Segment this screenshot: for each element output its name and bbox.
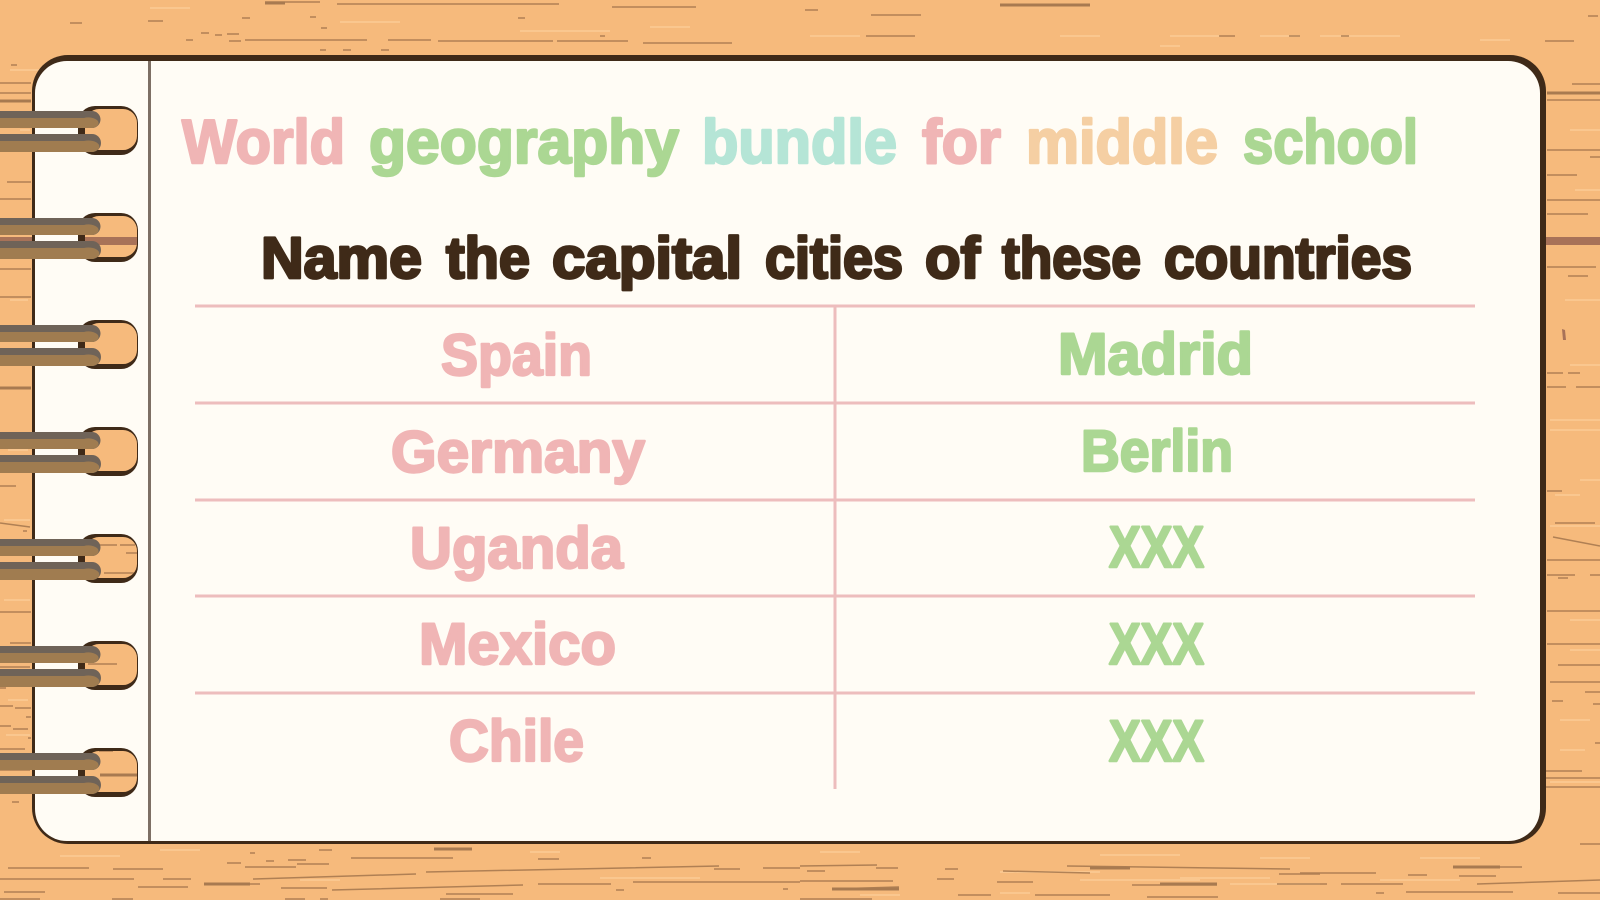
ring wires — [0, 111, 101, 794]
title: World — [182, 108, 345, 177]
heading: Name — [261, 226, 422, 291]
row: Spain: Spain — [441, 323, 592, 388]
spiral binding — [0, 106, 138, 797]
row: Mexico — [419, 612, 1204, 677]
row: Uganda: XXX — [1109, 515, 1204, 580]
row: Germany: Germany — [391, 420, 645, 485]
heading: capital — [552, 226, 742, 291]
title: school — [1243, 108, 1418, 177]
row: Germany: Berlin — [1081, 419, 1233, 484]
heading — [261, 226, 1412, 291]
row: Mexico: Mexico — [419, 612, 616, 677]
row: Germany — [391, 419, 1233, 485]
title: geography — [369, 108, 680, 177]
row: Spain — [441, 322, 1253, 388]
title — [182, 108, 1418, 177]
heading: cities — [765, 226, 903, 291]
row: Chile: XXX — [1109, 709, 1204, 774]
title: bundle — [702, 108, 897, 177]
row: Chile: Chile — [449, 709, 584, 774]
heading: these — [1002, 226, 1141, 291]
row: Mexico: XXX — [1109, 612, 1204, 677]
row: Chile — [449, 709, 1204, 774]
heading: the — [446, 226, 530, 291]
title: for — [922, 108, 1001, 177]
heading: countries — [1164, 226, 1412, 291]
row: Uganda — [410, 515, 1204, 581]
ring holes — [78, 106, 138, 797]
title: middle — [1026, 108, 1218, 177]
row: Uganda: Uganda — [410, 516, 624, 581]
heading: of — [925, 226, 981, 291]
table — [195, 306, 1475, 789]
row: Spain: Madrid — [1058, 322, 1253, 387]
